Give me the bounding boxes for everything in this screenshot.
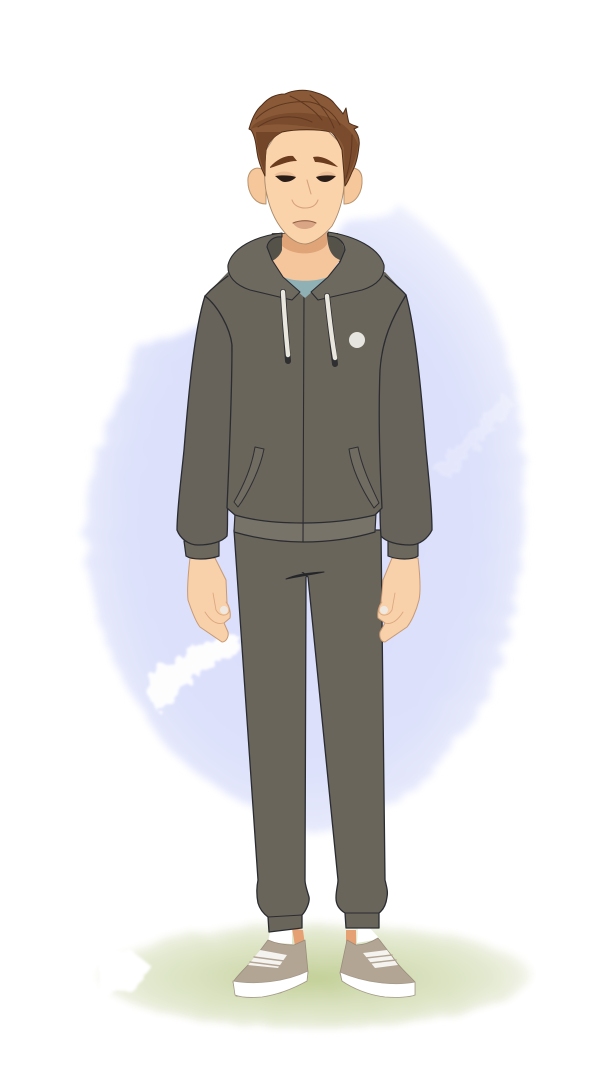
left hand (188, 558, 230, 642)
eyelids (274, 171, 336, 177)
left ear (248, 168, 266, 204)
drawstrings (283, 292, 335, 364)
right sleeve (365, 290, 432, 559)
pant cuffs and waist fill (240, 530, 379, 917)
left eyebrow (270, 156, 297, 168)
icon: right shoe (340, 926, 415, 997)
face (265, 128, 344, 244)
hair (249, 90, 359, 186)
background: lavender watercolor wash (86, 205, 525, 832)
nose (292, 180, 318, 208)
left pant leg (234, 530, 315, 932)
left eye (275, 175, 296, 182)
hood lining behind the neck (262, 233, 350, 262)
right eye (316, 175, 336, 182)
badge (349, 332, 365, 348)
hoodie waistband (234, 513, 376, 542)
zipper (303, 296, 304, 542)
right ear (344, 168, 362, 204)
figure (177, 90, 432, 997)
right pocket (349, 447, 379, 508)
hood (228, 232, 384, 300)
left sleeve (177, 290, 245, 559)
right eyebrow (313, 157, 338, 167)
right pant leg (300, 530, 387, 928)
ground: green grass patch (97, 921, 533, 1029)
teal t-shirt (282, 276, 329, 298)
left pocket (234, 447, 264, 507)
mouth (293, 220, 316, 229)
hoodie torso (205, 272, 406, 542)
neck (270, 236, 340, 281)
right hand (378, 558, 420, 642)
icon: left shoe (233, 926, 308, 997)
